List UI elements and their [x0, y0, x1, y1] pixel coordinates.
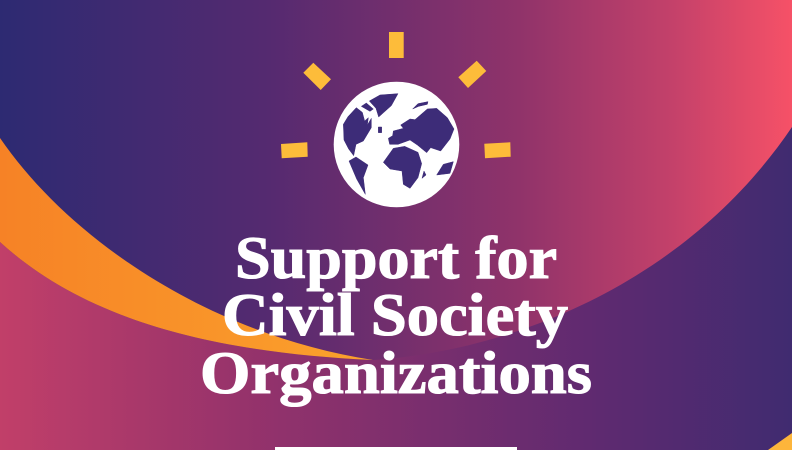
- icon: globe: [334, 82, 459, 207]
- title: Civil Society: [222, 282, 568, 348]
- title: [200, 225, 592, 406]
- background: lower swoosh gradient: [0, 127, 792, 450]
- title: Support for: [235, 225, 557, 291]
- title: Organizations: [200, 340, 592, 406]
- orange swoosh: [0, 138, 373, 360]
- icon: sun rays: [281, 32, 511, 158]
- white bar: [275, 447, 517, 450]
- yellow corner accent: [768, 433, 792, 450]
